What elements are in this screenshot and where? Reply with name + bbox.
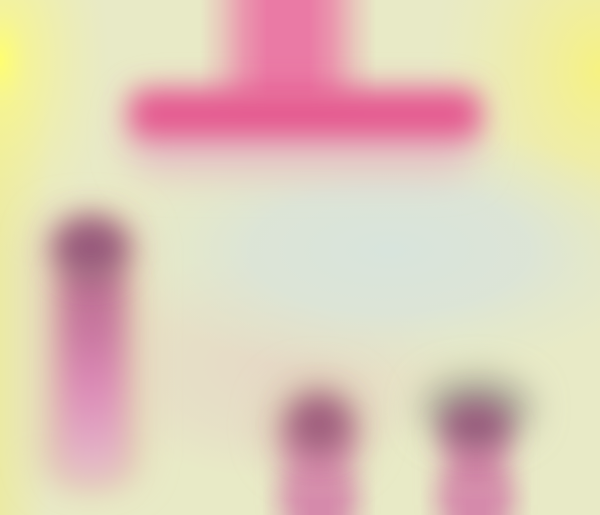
- right column head: [442, 401, 510, 449]
- middle column figure: [262, 377, 376, 515]
- left column head: [53, 216, 129, 280]
- right column body: [445, 430, 507, 505]
- header ribbon: [130, 90, 480, 138]
- middle column lower body: [266, 476, 372, 515]
- middle column head: [287, 394, 351, 454]
- header tab: [205, 0, 371, 104]
- header ribbon glow: [130, 95, 475, 175]
- middle column halo: [268, 377, 368, 473]
- left column figure: [40, 215, 140, 485]
- left column halo: [40, 215, 140, 485]
- header banner: [130, 0, 480, 175]
- right column figure: [420, 376, 532, 515]
- left column body: [60, 265, 124, 485]
- middle column body: [286, 430, 350, 505]
- right column lower body: [424, 476, 528, 515]
- right column shadow: [423, 376, 531, 440]
